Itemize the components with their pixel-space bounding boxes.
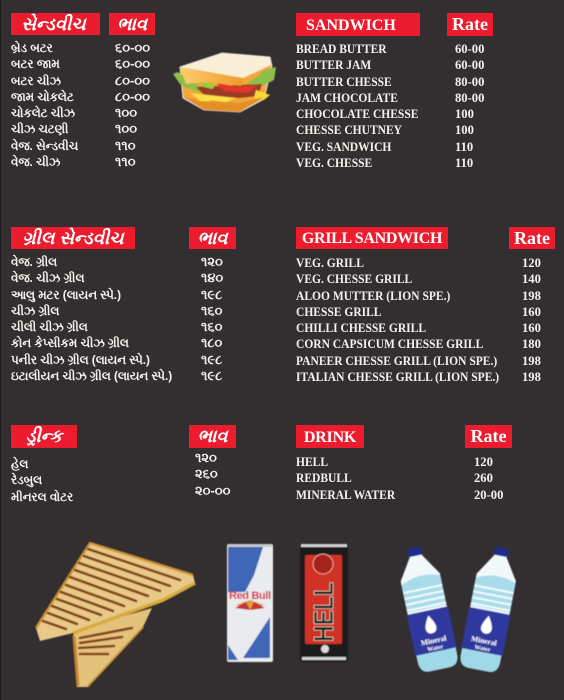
list: Gujarati grill prices: ૧૯૮ — [201, 368, 222, 383]
list: Gujarati sandwich names: બટર ચીઝ — [11, 74, 61, 88]
image: Red Bull can: Red Bull — [229, 590, 271, 602]
list: English sandwich prices: 100 — [455, 123, 474, 137]
list: English sandwich names: BUTTER JAM — [296, 58, 371, 72]
list: Gujarati grill prices: ૧૬૦ — [201, 319, 222, 334]
heading: DRINK: DRINK — [304, 429, 356, 446]
heading: SANDWICH: SANDWICH — [306, 17, 396, 34]
list: English grill prices — [522, 256, 541, 384]
list: English grill names: VEG. GRILL — [296, 256, 364, 270]
list: Gujarati drink names: રેડબુલ — [11, 473, 42, 487]
heading: Gujarati drink rate — [189, 425, 236, 448]
list: Gujarati grill names: ચીલી ચીઝ ગ્રીલ — [11, 320, 88, 334]
list: Gujarati sandwich names: ચીઝ ચટણી — [11, 122, 68, 136]
list: English grill names: VEG. CHESSE GRILL — [296, 272, 412, 286]
heading: drink Rate — [465, 425, 512, 448]
list: English sandwich prices: 100 — [455, 107, 474, 121]
list: Gujarati sandwich names: બટર જામ — [11, 57, 60, 71]
list: Gujarati sandwich prices: ૧૧૦ — [115, 138, 136, 152]
list: English sandwich prices: 110 — [455, 140, 473, 154]
list: English grill prices: 160 — [522, 305, 541, 319]
list: Gujarati drink prices: ૨૬૦ — [195, 466, 218, 481]
list: English sandwich names — [296, 42, 418, 170]
list: English grill names: CHILLI CHESSE GRILL — [296, 321, 426, 335]
bottle: right: Mineral — [470, 634, 498, 648]
list: Gujarati grill prices: ૧૯૮ — [201, 286, 222, 302]
list: English drink names — [296, 455, 396, 502]
list: English sandwich names: VEG. SANDWICH — [296, 140, 391, 154]
heading: Rate — [447, 13, 493, 36]
list: English grill prices: 160 — [522, 321, 541, 335]
list: English grill names: CORN CAPSICUM CHESSE GRILL — [296, 337, 483, 351]
list: English sandwich prices: 60-00 — [455, 58, 484, 72]
list: Gujarati grill prices: ૧૯૮ — [201, 352, 222, 366]
heading: Gujarati grill rate — [189, 227, 236, 249]
bottle: right — [458, 544, 523, 674]
list: English sandwich prices — [455, 42, 484, 170]
list: English sandwich names: BUTTER CHESSE — [296, 74, 392, 88]
heading: Gujarati drink rate: ભાવ — [197, 426, 228, 446]
list: English grill prices: 120 — [522, 256, 541, 270]
bottle: left — [393, 544, 460, 674]
list: English drink prices: 260 — [474, 471, 493, 485]
list: English sandwich names: CHOCOLATE CHESSE — [296, 107, 418, 121]
image: Hell can — [300, 544, 348, 662]
heading: Gujarati drink — [11, 425, 77, 448]
list: Gujarati sandwich prices: ૬૦-૦૦ — [115, 56, 150, 71]
list: English drink prices — [474, 455, 503, 502]
list: English drink prices: 20-00 — [474, 488, 503, 502]
list: Gujarati sandwich names: ચોકલેટ ચીઝ — [11, 106, 75, 120]
list: English grill names: ITALIAN CHESSE GRILL (LION SPE.) — [296, 370, 499, 384]
list: English sandwich prices: 80-00 — [455, 91, 484, 105]
list: Gujarati drink prices — [195, 450, 230, 498]
image: mineral water bottles — [393, 544, 523, 674]
list: English grill prices: 198 — [522, 288, 541, 302]
heading: grill Rate: Rate — [514, 228, 550, 248]
heading: Gujarati grill sandwich: ગ્રીલ સેન્ડવીચ — [22, 228, 124, 248]
list: Gujarati sandwich prices: ૧૦૦ — [115, 121, 137, 136]
bottle: left: Mineral — [420, 633, 447, 648]
list: English sandwich names: JAM CHOCOLATE — [296, 91, 398, 105]
heading: Rate: Rate — [452, 14, 488, 34]
bottle: right: Water — [474, 645, 491, 654]
list: Gujarati drink names: હેલ — [11, 457, 28, 471]
list: Gujarati grill prices — [201, 254, 223, 383]
list: Gujarati grill names: કોન કેપ્સીકમ ચીઝ ગ્રીલ — [11, 336, 129, 350]
list: English sandwich prices: 80-00 — [455, 74, 484, 88]
list: English sandwich prices: 110 — [455, 156, 473, 170]
list: English grill prices: 198 — [522, 370, 541, 384]
list: Gujarati grill prices: ૧૮૦ — [201, 335, 222, 350]
list: Gujarati sandwich prices: ૮૦-૦૦ — [115, 72, 150, 88]
list: Gujarati grill names: પનીર ચીઝ ગ્રીલ (લાયન સ્પે.) — [11, 352, 150, 366]
list: Gujarati sandwich names — [11, 40, 78, 169]
list: Gujarati sandwich names: વેજ. સેન્ડવીચ — [11, 138, 78, 152]
list: English drink names: HELL — [296, 455, 328, 469]
heading: Gujarati sandwich: સેન્ડવીચ — [21, 14, 86, 34]
list: English sandwich names: VEG. CHESSE — [296, 156, 372, 170]
list: Gujarati grill prices: ૧૨૦ — [201, 254, 223, 269]
heading: Gujarati rate — [109, 13, 155, 35]
bottle: left: Water — [427, 644, 444, 653]
list: Gujarati sandwich prices: ૮૦-૦૦ — [115, 89, 150, 104]
list: Gujarati grill names: વેજ. ચીઝ ગ્રીલ — [11, 271, 84, 285]
list: Gujarati drink names: મીનરલ વોટર — [11, 490, 73, 504]
list: English grill names: ALOO MUTTER (LION SPE.) — [296, 288, 450, 302]
heading: Gujarati drink: ડ્રીન્ક — [26, 426, 62, 446]
list: Gujarati grill prices: ૧૬૦ — [201, 303, 222, 318]
heading: SANDWICH — [296, 13, 420, 36]
list: Gujarati grill names: આલુ મટર (લાયન સ્પે.) — [11, 288, 121, 302]
heading: GRILL SANDWICH: GRILL SANDWICH — [302, 230, 442, 247]
list: English sandwich prices: 60-00 — [455, 42, 484, 56]
list: Gujarati grill names — [11, 254, 172, 383]
heading: Gujarati grill rate: ભાવ — [197, 228, 228, 248]
heading: Gujarati sandwich — [11, 13, 100, 35]
list: English grill names: PANEER CHESSE GRILL (LION SPE.) — [296, 354, 497, 368]
list: Gujarati drink prices: ૨૦-૦૦ — [195, 482, 230, 498]
list: English grill prices: 180 — [522, 337, 541, 351]
list: Gujarati sandwich names: જામ ચોકલેટ — [11, 90, 74, 104]
list: Gujarati drink prices: ૧૨૦ — [195, 450, 217, 465]
list: English grill prices: 140 — [522, 272, 541, 286]
list: Gujarati sandwich prices: ૧૧૦ — [115, 154, 136, 169]
list: English grill prices: 198 — [522, 354, 541, 368]
list: English sandwich names: BREAD BUTTER — [296, 42, 387, 56]
list: Gujarati grill names: ચીઝ ગ્રીલ — [11, 304, 59, 318]
list: Gujarati grill names: ઇટાલીયન ચીઝ ગ્રીલ (લાયન સ્પે.) — [11, 369, 172, 383]
list: Gujarati grill names: વેજ. ગ્રીલ — [11, 255, 57, 269]
list: English drink names: MINERAL WATER — [296, 488, 395, 502]
list: Gujarati drink names — [11, 456, 74, 504]
list: English drink prices: 120 — [474, 455, 493, 469]
list: Gujarati sandwich prices: ૧૦૦ — [115, 105, 137, 120]
heading: drink Rate: Rate — [470, 426, 506, 446]
list: English grill names — [296, 256, 499, 384]
list: English sandwich names: CHESSE CHUTNEY — [296, 123, 402, 137]
image: grilled sandwich — [36, 543, 195, 687]
image: club sandwich — [173, 53, 276, 112]
list: Gujarati grill prices: ૧૪૦ — [201, 270, 223, 285]
list: Gujarati sandwich prices — [115, 40, 150, 169]
image: Red Bull can — [227, 544, 273, 662]
heading: DRINK — [296, 425, 364, 448]
heading: Gujarati rate: ભાવ — [117, 14, 147, 34]
list: Gujarati sandwich prices: ૬૦-૦૦ — [115, 40, 150, 55]
list: English grill names: CHESSE GRILL — [296, 305, 382, 319]
image: Hell can: HELL — [308, 582, 339, 642]
list: Gujarati sandwich names: બ્રેડ બટર — [11, 41, 53, 55]
list: English drink names: REDBULL — [296, 471, 352, 485]
list: Gujarati sandwich names: વેજ. ચીઝ — [11, 155, 60, 169]
